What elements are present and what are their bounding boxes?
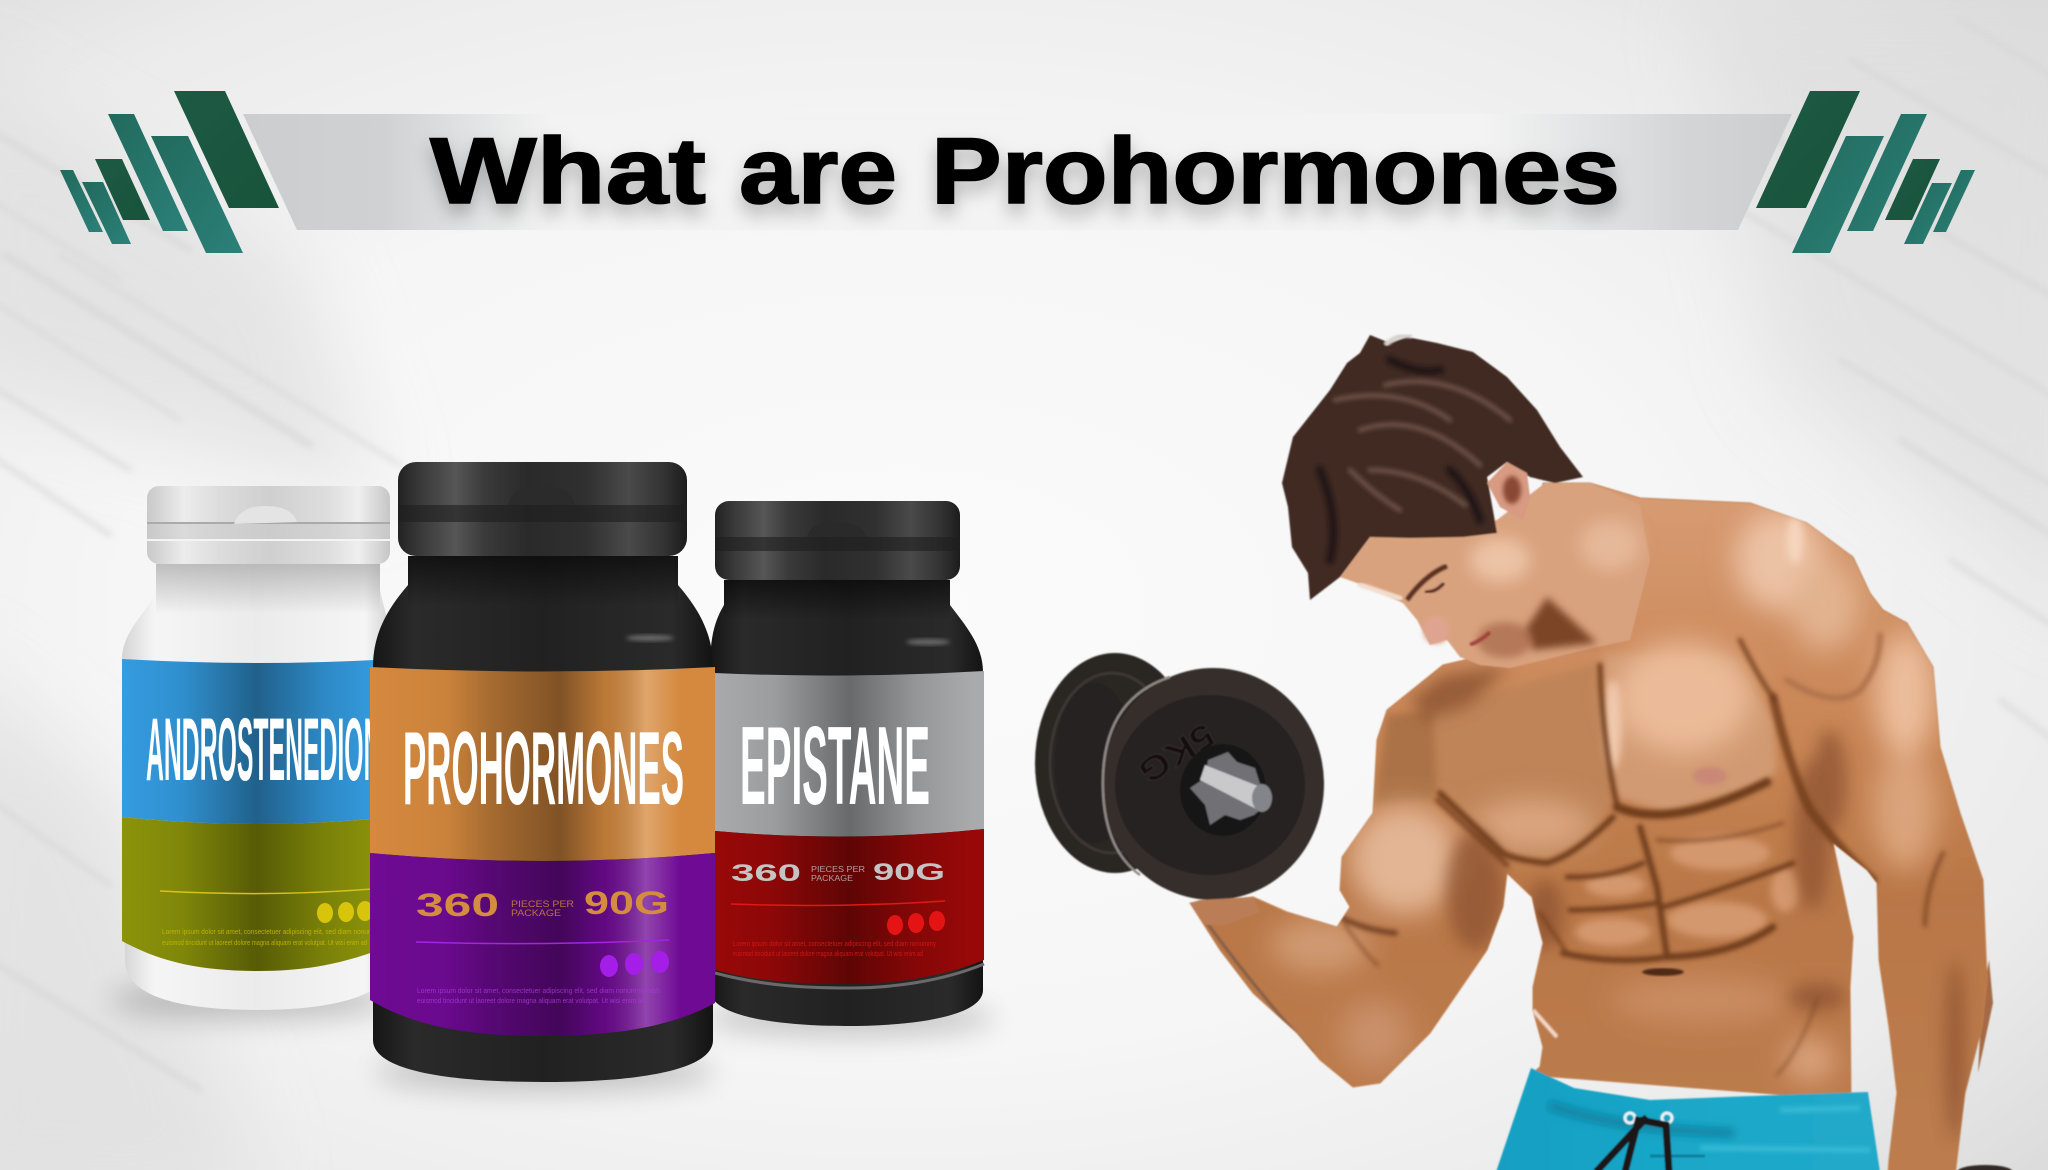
plate rim <box>1103 677 1170 875</box>
heading: are <box>739 118 897 223</box>
shoulder shadow near chin <box>1410 665 1510 720</box>
bottle shadows <box>110 980 995 1092</box>
red label band <box>715 829 984 984</box>
drawstring <box>1596 1117 1669 1170</box>
divider <box>160 889 372 894</box>
highlights <box>1270 510 1937 1082</box>
fine print: euismod tincidunt ut laoreet dolore magna aliquam erat volutpat. Ut wisi enim ad <box>417 996 645 1005</box>
side shadows <box>1447 730 1965 1140</box>
silver label band <box>715 671 984 837</box>
quantity text: PACKAGE <box>811 874 853 883</box>
hand <box>1190 897 1260 925</box>
hub <box>1180 744 1266 836</box>
navel <box>1642 968 1684 976</box>
back plate <box>1035 653 1195 873</box>
hair tuft <box>1385 335 1412 345</box>
eye <box>1425 583 1444 592</box>
eyebrow <box>1407 566 1447 600</box>
black body <box>710 580 983 1026</box>
orange label band <box>370 667 715 861</box>
fine print: euismod tincidunt ut laoreet dolore magna aliquam erat volutpat. Ut wisi enim ad <box>733 949 923 958</box>
muscle shading <box>1207 510 1965 1140</box>
heading: What <box>430 118 706 223</box>
quantity text: PIECES PER <box>511 899 575 909</box>
body silhouette <box>1190 483 1987 1170</box>
muscular man with dumbbell <box>1035 335 2013 1170</box>
muscle contours <box>1340 635 1943 1075</box>
fine print: Lorem ipsum dolor sit amet, consectetuer adipiscing elit, sed diam nonummy <box>162 927 382 936</box>
quantity text: 90G <box>584 885 669 921</box>
fine print: euismod tincidunt ut laoreet dolore magna aliquam erat volutpat. Ut wisi enim ad <box>162 938 367 947</box>
mouth <box>1470 632 1490 645</box>
purple label band <box>370 853 715 1036</box>
banner ribbon <box>243 114 1792 230</box>
quantity text: 360 <box>416 887 499 923</box>
forehead edge <box>1358 584 1402 599</box>
fine print <box>417 986 660 1005</box>
pectorals <box>1375 653 1777 860</box>
infographic canvas: PROHORMONES <box>403 711 684 827</box>
jaw shading <box>1477 622 1533 658</box>
front plate <box>1102 668 1324 900</box>
quantity text <box>731 859 945 887</box>
infographic canvas: EPISTANE <box>740 704 930 828</box>
bolt <box>1200 765 1268 812</box>
black body <box>373 556 713 1082</box>
hair strands <box>1320 360 1510 560</box>
black cap <box>398 462 687 556</box>
shorts <box>1496 1068 1880 1170</box>
divider <box>731 901 945 905</box>
neck shadow <box>1525 597 1597 650</box>
dumbbell <box>1035 653 1324 900</box>
ear <box>1487 462 1530 520</box>
fine print <box>162 927 382 947</box>
weight marking: 5KG <box>1131 715 1221 791</box>
abdominal blocks <box>1575 836 1799 946</box>
white cap <box>147 486 390 564</box>
dots <box>887 911 945 935</box>
black cap <box>715 501 960 580</box>
quantity text: 360 <box>731 860 801 887</box>
bottle: Prohormones <box>370 462 715 1082</box>
quantity text: 90G <box>873 859 945 886</box>
quantity text: PIECES PER <box>811 865 865 874</box>
fine print: Lorem ipsum dolor sit amet, consectetuer adipiscing elit, sed diam nonummy nibh <box>417 986 660 995</box>
sliver behind far arm <box>1978 960 1993 1073</box>
far hand <box>1957 1165 2013 1170</box>
dots <box>317 901 373 923</box>
title banner <box>243 114 1792 230</box>
label rim <box>715 964 984 988</box>
fine print <box>733 939 936 958</box>
eyelets <box>1625 1113 1635 1123</box>
fine print: Lorem ipsum dolor sit amet, consectetuer adipiscing elit, sed diam nonummy <box>733 939 936 948</box>
plate recess <box>1115 695 1305 875</box>
nipples <box>1693 767 1727 785</box>
bottle: Androstenedione <box>122 486 398 1010</box>
hair <box>1282 335 1583 600</box>
hip highlight <box>1533 1010 1557 1037</box>
nose <box>1423 616 1449 644</box>
heading: Prohormones <box>931 118 1620 223</box>
divider <box>416 940 669 944</box>
quantity text: PACKAGE <box>511 908 561 918</box>
neck and face <box>1340 483 1650 668</box>
forearm vein edge <box>1207 923 1313 1053</box>
icon: left green bars <box>60 91 279 253</box>
bottle: Epistane <box>710 501 984 1026</box>
blue label band <box>122 659 392 824</box>
icon: right green bars <box>1756 91 1975 253</box>
infographic canvas: ANDROSTENEDIONE <box>146 699 398 799</box>
quantity text <box>416 885 669 923</box>
white body <box>122 564 392 1010</box>
heading <box>430 118 1620 223</box>
dots <box>600 951 669 977</box>
olive label band <box>122 817 392 971</box>
